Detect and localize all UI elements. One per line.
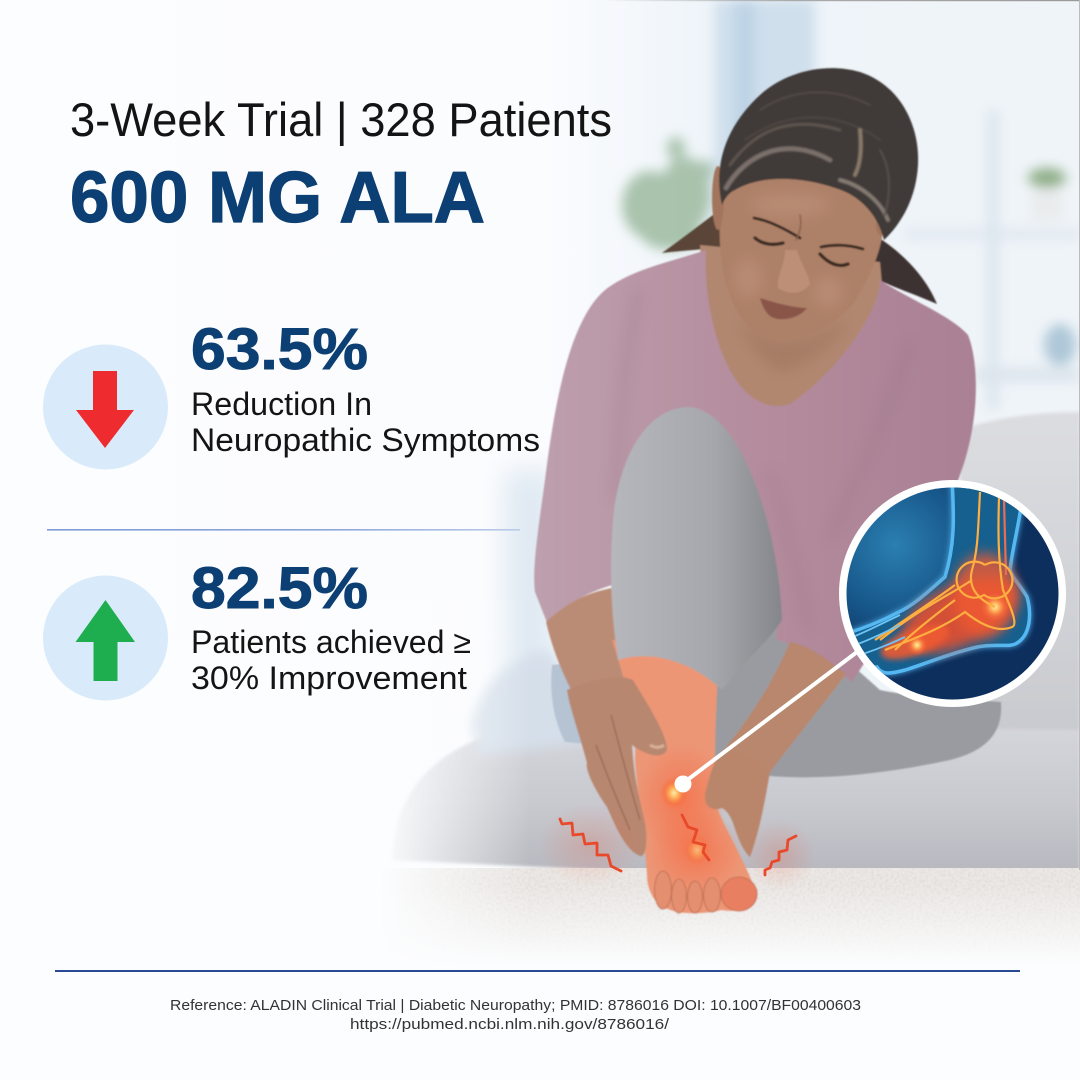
lower thigh <box>700 610 1001 777</box>
neck shadow <box>735 315 850 372</box>
label: patients achieved improvement: Patients achieved ≥ <box>191 624 471 660</box>
icon: up arrow <box>43 576 168 700</box>
foot pain glow <box>636 742 743 896</box>
stat: 82.5 percent: 82.5% <box>191 556 368 621</box>
shirt folds <box>615 290 910 630</box>
heading: trial details: 3-Week Trial | 328 Patients <box>70 93 612 146</box>
nose <box>778 250 810 293</box>
sofa back cushion <box>960 412 1080 740</box>
ponytail <box>860 232 937 304</box>
left hand <box>567 677 667 856</box>
reference text: Reference: ALADIN Clinical Trial | Diabetic Neuropathy; PMID: 8786016 DOI: 10.1007/BF00400603 <box>170 997 861 1014</box>
white fade over room <box>0 600 1080 1080</box>
reference text: https://pubmed.ncbi.nlm.nih.gov/8786016/ <box>350 1016 670 1033</box>
right hand <box>705 752 770 857</box>
pale wall patch beside arm <box>505 470 555 730</box>
shirt <box>534 250 976 682</box>
reference text <box>170 997 861 1033</box>
left hand creases <box>596 715 664 830</box>
icon: down arrow <box>43 344 168 470</box>
plant: shelf <box>1028 168 1066 220</box>
sofa seat cushion <box>392 723 1080 873</box>
sofa <box>392 412 1080 873</box>
blurred room backdrop <box>622 0 1080 410</box>
hair strands <box>726 92 889 220</box>
face <box>720 159 884 340</box>
label: reduction in neuropathic symptoms: Neuropathic Symptoms <box>191 422 540 458</box>
vase <box>1044 324 1076 366</box>
hair <box>719 68 918 240</box>
x-ray foot <box>840 470 1030 673</box>
mouth <box>760 298 807 319</box>
heading: dose: 600 MG ALA <box>70 158 485 238</box>
wisp of hair <box>662 208 728 253</box>
side cushion <box>470 650 600 755</box>
eyes and brows <box>754 215 863 265</box>
stat: 63.5 percent: 63.5% <box>191 317 368 382</box>
ears <box>712 166 886 235</box>
right forearm <box>716 642 846 775</box>
foot <box>612 640 755 913</box>
raised shin <box>611 407 782 690</box>
callout: foot x-ray circle <box>839 470 1066 707</box>
toes <box>654 871 757 913</box>
face highlights <box>734 193 842 308</box>
far leg <box>551 660 600 745</box>
pointer line and dot <box>674 652 857 792</box>
left forearm <box>546 588 640 725</box>
divider <box>47 529 520 531</box>
pain squiggles <box>560 815 796 875</box>
label: reduction in neuropathic symptoms <box>191 386 540 458</box>
carpet <box>0 868 1080 968</box>
pain squiggle aura <box>538 803 816 891</box>
label: patients achieved improvement <box>191 624 471 696</box>
image edge lines <box>600 0 1080 870</box>
woman <box>534 68 1001 913</box>
label: reduction in neuropathic symptoms: Reduction In <box>191 386 372 422</box>
footer rule <box>55 970 1020 972</box>
label: patients achieved improvement: 30% Improvement <box>191 660 467 696</box>
plant: left <box>622 137 714 250</box>
neck and chest <box>700 245 882 420</box>
